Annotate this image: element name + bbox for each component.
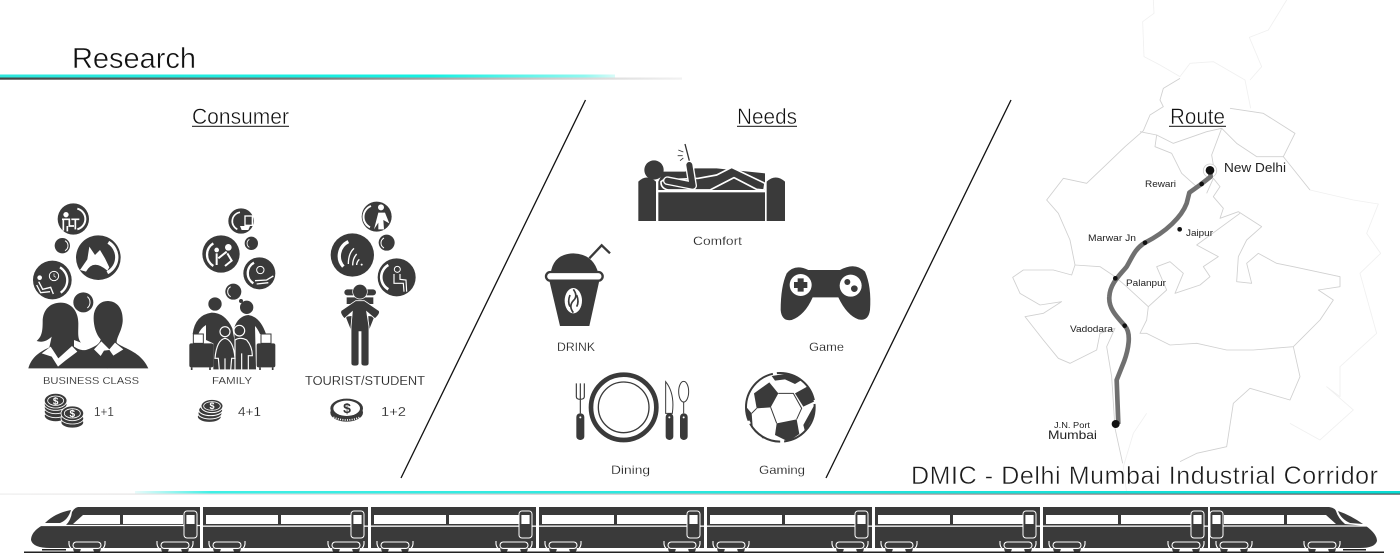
label: BUSINESS CLASS: BUSINESS CLASS — [43, 375, 139, 387]
label: 1+2: 1+2 — [381, 404, 406, 419]
label: Gaming: Gaming — [759, 463, 805, 477]
train: rear car — [1210, 507, 1377, 553]
train: rail — [24, 552, 1384, 553]
train illustration — [24, 507, 1384, 553]
label: 4+1: 4+1 — [238, 404, 261, 419]
train: front car — [31, 507, 200, 553]
train: middle cars — [203, 507, 1208, 553]
icon: coin 1+2 — [330, 399, 363, 422]
icon: game controller — [781, 266, 870, 320]
label: Vadodara: Vadodara — [1070, 324, 1114, 335]
label: Dining: Dining — [611, 463, 650, 477]
icon: coins 1+1 — [44, 393, 84, 428]
icon: football — [746, 373, 815, 442]
heading: Needs: Needs — [737, 104, 797, 129]
dollar signs: $ — [70, 409, 76, 420]
dollar signs: $ — [209, 401, 215, 411]
footer rule — [0, 491, 1400, 495]
heading: Route: Route — [1170, 104, 1225, 129]
icon: coins 4+1 — [197, 399, 223, 422]
icon: drink cup — [546, 245, 610, 326]
caption: DMIC: DMIC - Delhi Mumbai Industrial Corridor — [911, 462, 1378, 490]
header: Research: Research — [72, 43, 196, 75]
header: Research — [0, 43, 682, 80]
dollar signs: $ — [343, 400, 351, 416]
label: New Delhi: New Delhi — [1224, 160, 1286, 175]
label: Comfort: Comfort — [693, 234, 743, 248]
label: Mumbai: Mumbai — [1048, 428, 1097, 442]
panel: consumer — [28, 202, 425, 428]
label: 1+1: 1+1 — [94, 404, 114, 419]
icon: dining plate and cutlery — [576, 375, 689, 440]
icon: tourist thought bubbles — [331, 202, 416, 296]
map of north-west India — [1013, 0, 1381, 493]
icon: family thought bubbles — [202, 208, 275, 300]
heading: Consumer: Consumer — [192, 104, 289, 129]
label: Game: Game — [809, 340, 844, 354]
label: Marwar Jn: Marwar Jn — [1088, 233, 1136, 244]
icon: family figures — [189, 297, 275, 370]
icon: comfort sofa — [638, 144, 785, 221]
icon: tourist figure — [341, 284, 379, 366]
panel: needs — [546, 144, 870, 477]
divider: needs and route — [826, 100, 1011, 478]
route line with stops — [1109, 166, 1214, 428]
dollar signs — [53, 396, 351, 420]
divider: consumer and needs — [401, 100, 586, 478]
icon: business class — [28, 203, 148, 368]
dollar signs: $ — [53, 396, 59, 408]
label: Jaipur: Jaipur — [1186, 228, 1213, 239]
label: FAMILY: FAMILY — [212, 375, 252, 387]
label: J.N. Port: J.N. Port — [1054, 420, 1091, 430]
label: DRINK: DRINK — [557, 342, 595, 354]
label: TOURIST/STUDENT: TOURIST/STUDENT — [305, 373, 425, 388]
label: Rewari: Rewari — [1145, 179, 1176, 190]
panel: route — [1048, 160, 1286, 442]
label: Palanpur: Palanpur — [1126, 278, 1166, 289]
